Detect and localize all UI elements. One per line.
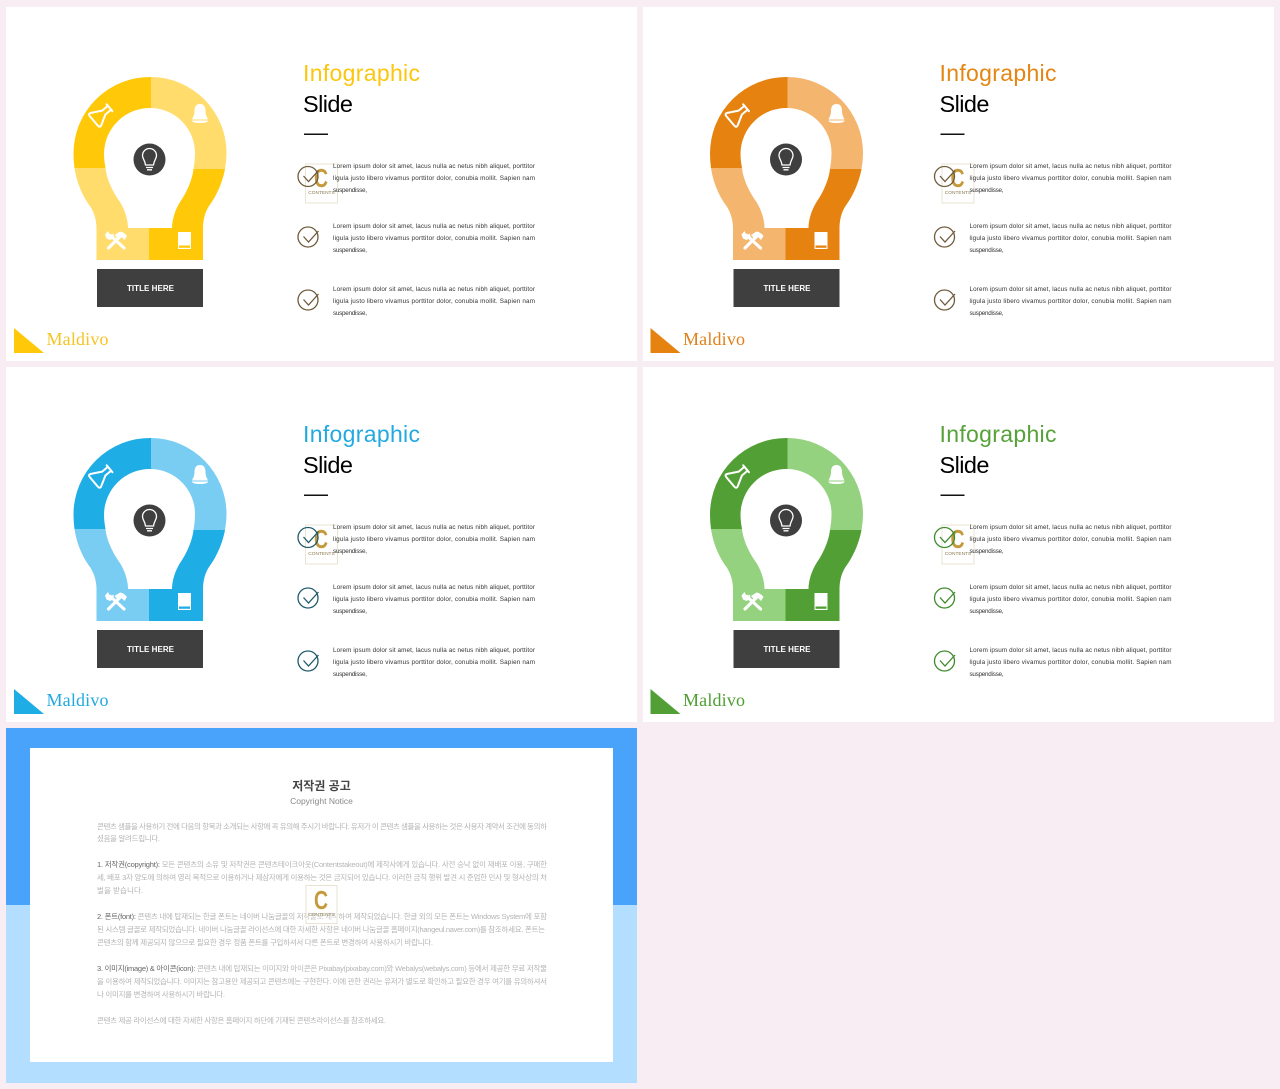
list item 3: suspendisse, xyxy=(970,671,1004,678)
list item 3: ligula justo libero vivamus porttitor dolor, conubia mollit. Sapien nam xyxy=(333,298,535,305)
list item 2: Lorem ipsum dolor sit amet, lacus nulla ac netus nibh aliquet, porttitor xyxy=(970,223,1172,230)
title box xyxy=(97,269,203,307)
logo xyxy=(650,328,745,353)
list item 2 xyxy=(934,223,1172,254)
list item 1: suspendisse, xyxy=(970,187,1004,194)
panel: green slide xyxy=(643,367,1274,722)
heading: Infographic xyxy=(303,421,420,447)
title box xyxy=(734,269,840,307)
list item 1: suspendisse, xyxy=(970,548,1004,555)
watermark xyxy=(306,163,338,203)
notice item 3: 나 이미지를 변경하여 사용하시기 바랍니다. xyxy=(97,989,225,999)
logo: Maldivo xyxy=(683,690,745,710)
list item 2: ligula justo libero vivamus porttitor dolor, conubia mollit. Sapien nam xyxy=(970,235,1172,242)
lightbulb diagram xyxy=(710,438,863,621)
watermark: CONTENTS xyxy=(945,551,971,557)
list item 1: suspendisse, xyxy=(333,548,367,555)
title box: TITLE HERE xyxy=(127,645,175,654)
list item 3: ligula justo libero vivamus porttitor dolor, conubia mollit. Sapien nam xyxy=(333,659,535,666)
logo: Maldivo xyxy=(46,690,108,710)
watermark xyxy=(942,524,974,564)
list item 2 xyxy=(298,584,535,615)
list item 1: ligula justo libero vivamus porttitor dolor, conubia mollit. Sapien nam xyxy=(970,175,1172,182)
list item 1: Lorem ipsum dolor sit amet, lacus nulla ac netus nibh aliquet, porttitor xyxy=(333,163,535,170)
panel: yellow slide xyxy=(6,7,637,361)
watermark: CONTENTS xyxy=(308,190,335,196)
logo xyxy=(14,689,108,714)
notice item 3 xyxy=(97,963,547,999)
list item 2: suspendisse, xyxy=(970,608,1004,615)
list item 1: Lorem ipsum dolor sit amet, lacus nulla ac netus nibh aliquet, porttitor xyxy=(970,163,1172,170)
title box: TITLE HERE xyxy=(127,284,175,293)
notice intro: 셨음을 알려드립니다. xyxy=(97,833,160,843)
logo: Maldivo xyxy=(46,329,108,349)
list item 2: suspendisse, xyxy=(970,247,1004,254)
heading: Slide xyxy=(940,452,990,478)
list item 3: Lorem ipsum dolor sit amet, lacus nulla ac netus nibh aliquet, porttitor xyxy=(333,647,535,654)
list item 2: suspendisse, xyxy=(333,247,367,254)
list item 1: ligula justo libero vivamus porttitor dolor, conubia mollit. Sapien nam xyxy=(970,536,1172,543)
notice item 2 xyxy=(97,911,547,947)
notice item 2: 콘텐츠의 함께 제공되지 않으므로 필요한 경우 정품 폰트를 구입하셔서 다른 폰트로 변경하여 사용하시기 바랍니다. xyxy=(97,937,433,947)
list item 3: suspendisse, xyxy=(333,310,367,317)
watermark: CONTENTS xyxy=(308,551,335,557)
list item 1: ligula justo libero vivamus porttitor dolor, conubia mollit. Sapien nam xyxy=(333,175,535,182)
watermark: C xyxy=(314,524,328,554)
notice intro xyxy=(97,821,547,843)
list item 2: ligula justo libero vivamus porttitor dolor, conubia mollit. Sapien nam xyxy=(333,596,535,603)
list item 2: Lorem ipsum dolor sit amet, lacus nulla ac netus nibh aliquet, porttitor xyxy=(970,584,1172,591)
heading: Infographic xyxy=(303,60,420,86)
list item 3 xyxy=(298,647,535,678)
heading: Infographic xyxy=(940,60,1056,86)
title box: TITLE HERE xyxy=(764,645,811,654)
notice heading: 저작권 공고 xyxy=(292,778,351,793)
heading: Slide xyxy=(940,91,990,117)
list item 3: Lorem ipsum dolor sit amet, lacus nulla ac netus nibh aliquet, porttitor xyxy=(970,286,1172,293)
logo: Maldivo xyxy=(683,329,745,349)
list item 3: suspendisse, xyxy=(333,671,367,678)
list item 1: Lorem ipsum dolor sit amet, lacus nulla ac netus nibh aliquet, porttitor xyxy=(333,524,535,531)
logo xyxy=(14,328,108,353)
list item 1: ligula justo libero vivamus porttitor dolor, conubia mollit. Sapien nam xyxy=(333,536,535,543)
watermark: CONTENTS xyxy=(308,912,335,918)
list item 2: Lorem ipsum dolor sit amet, lacus nulla ac netus nibh aliquet, porttitor xyxy=(333,223,535,230)
watermark: C xyxy=(314,163,328,193)
panel: orange slide xyxy=(643,7,1274,361)
notice intro: 콘텐츠 샘플을 사용하기 전에 다음의 항목과 소개되는 사항에 꼭 유의해 주시기 바랍니다. 유저가 이 콘텐츠 샘플을 사용하는 것은 사용자 계약서 조건에 동의하 xyxy=(97,821,547,831)
notice heading: Copyright Notice xyxy=(290,796,353,806)
title box: TITLE HERE xyxy=(764,284,811,293)
panel: copyright notice slide xyxy=(6,728,637,1083)
panel: blue slide xyxy=(6,367,637,722)
heading: Infographic xyxy=(940,421,1056,447)
list item 1: Lorem ipsum dolor sit amet, lacus nulla ac netus nibh aliquet, porttitor xyxy=(970,524,1172,531)
list item 2: Lorem ipsum dolor sit amet, lacus nulla ac netus nibh aliquet, porttitor xyxy=(333,584,535,591)
list item 1 xyxy=(934,163,1172,194)
notice heading xyxy=(290,778,353,806)
watermark xyxy=(942,163,974,203)
logo xyxy=(650,689,745,714)
lightbulb diagram xyxy=(74,438,227,621)
list item 3 xyxy=(934,286,1172,317)
notice item 1: 벌을 받습니다. xyxy=(97,885,143,895)
list item 2: ligula justo libero vivamus porttitor dolor, conubia mollit. Sapien nam xyxy=(970,596,1172,603)
notice item 2: 된 시스템 글꼴로 제작되었습니다. 네이버 나눔글꼴 라이선스에 대한 자세한 사항은 네이버 나눔글꼴 홈페이지(hangeul.naver.com)를 참조하세요. 폰트는 xyxy=(97,924,545,934)
list item 2 xyxy=(934,584,1172,615)
title box xyxy=(97,630,203,668)
list item 2: suspendisse, xyxy=(333,608,367,615)
list item 1 xyxy=(298,163,535,194)
watermark: C xyxy=(950,163,965,193)
heading xyxy=(303,421,420,496)
heading xyxy=(303,60,420,135)
list item 1: suspendisse, xyxy=(333,187,367,194)
heading xyxy=(940,60,1056,135)
list item 3: Lorem ipsum dolor sit amet, lacus nulla ac netus nibh aliquet, porttitor xyxy=(970,647,1172,654)
list item 3 xyxy=(298,286,535,317)
watermark xyxy=(306,524,338,564)
list item 2: ligula justo libero vivamus porttitor dolor, conubia mollit. Sapien nam xyxy=(333,235,535,242)
lightbulb diagram xyxy=(710,77,863,260)
list item 3: ligula justo libero vivamus porttitor dolor, conubia mollit. Sapien nam xyxy=(970,659,1172,666)
list item 2 xyxy=(298,223,535,254)
notice item 3: 3. 이미지(image) & 아이콘(icon): 콘텐츠 내에 탑재되는 이미지와 아이콘은 Pixabay(pixabay.com)와 Webalys(webalys.com) 등에서 제공한 무료 저작물 xyxy=(97,963,547,973)
notice closing: 콘텐츠 제공 라이선스에 대한 자세한 사항은 홈페이지 하단에 기재된 콘텐츠라이선스를 참조하세요. xyxy=(97,1015,386,1025)
list item 1 xyxy=(298,524,535,555)
heading: Slide xyxy=(303,452,353,478)
notice item 1: 1. 저작권(copyright): 모든 콘텐츠의 소유 및 저작권은 콘텐츠테이크아웃(Contentstakeout)에 제작사에게 있습니다. 사전 승낙 없이 재배포 이용, 구매한 xyxy=(97,859,547,869)
heading: Slide xyxy=(303,91,353,117)
watermark: CONTENTS xyxy=(945,190,971,196)
list item 3: ligula justo libero vivamus porttitor dolor, conubia mollit. Sapien nam xyxy=(970,298,1172,305)
lightbulb diagram xyxy=(74,77,227,260)
notice item 1: 세, 배포 3자 양도에 의하여 영리 목적으로 이용하거나 제삼자에게 이용하는 것은 금지되어 있습니다. 이러한 금칙 행위 발견 시 준엄한 민사 및 형사상의 처 xyxy=(97,872,547,882)
watermark: C xyxy=(950,524,965,554)
list item 3: suspendisse, xyxy=(970,310,1004,317)
notice item 1 xyxy=(97,859,547,895)
list item 3 xyxy=(934,647,1172,678)
watermark: C xyxy=(314,885,328,915)
list item 1 xyxy=(934,524,1172,555)
watermark xyxy=(306,885,337,924)
list item 3: Lorem ipsum dolor sit amet, lacus nulla ac netus nibh aliquet, porttitor xyxy=(333,286,535,293)
notice item 3: 을 이용하여 제작되었습니다. 이미지는 참고용만 제공되고 콘텐츠에는 구현한다. 이에 관한 권리는 유저가 별도로 확인하고 필요한 경우 여기를 유의하셔서 xyxy=(97,976,547,986)
heading xyxy=(940,421,1056,496)
notice item 2: 2. 폰트(font): 콘텐츠 내에 탑재되는 한글 폰트는 네이버 나눔글꼴의 저작물로 제작하여 제작되었습니다. 한글 외의 모든 폰트는 Windows System에 포함 xyxy=(97,911,547,921)
title box xyxy=(734,630,840,668)
